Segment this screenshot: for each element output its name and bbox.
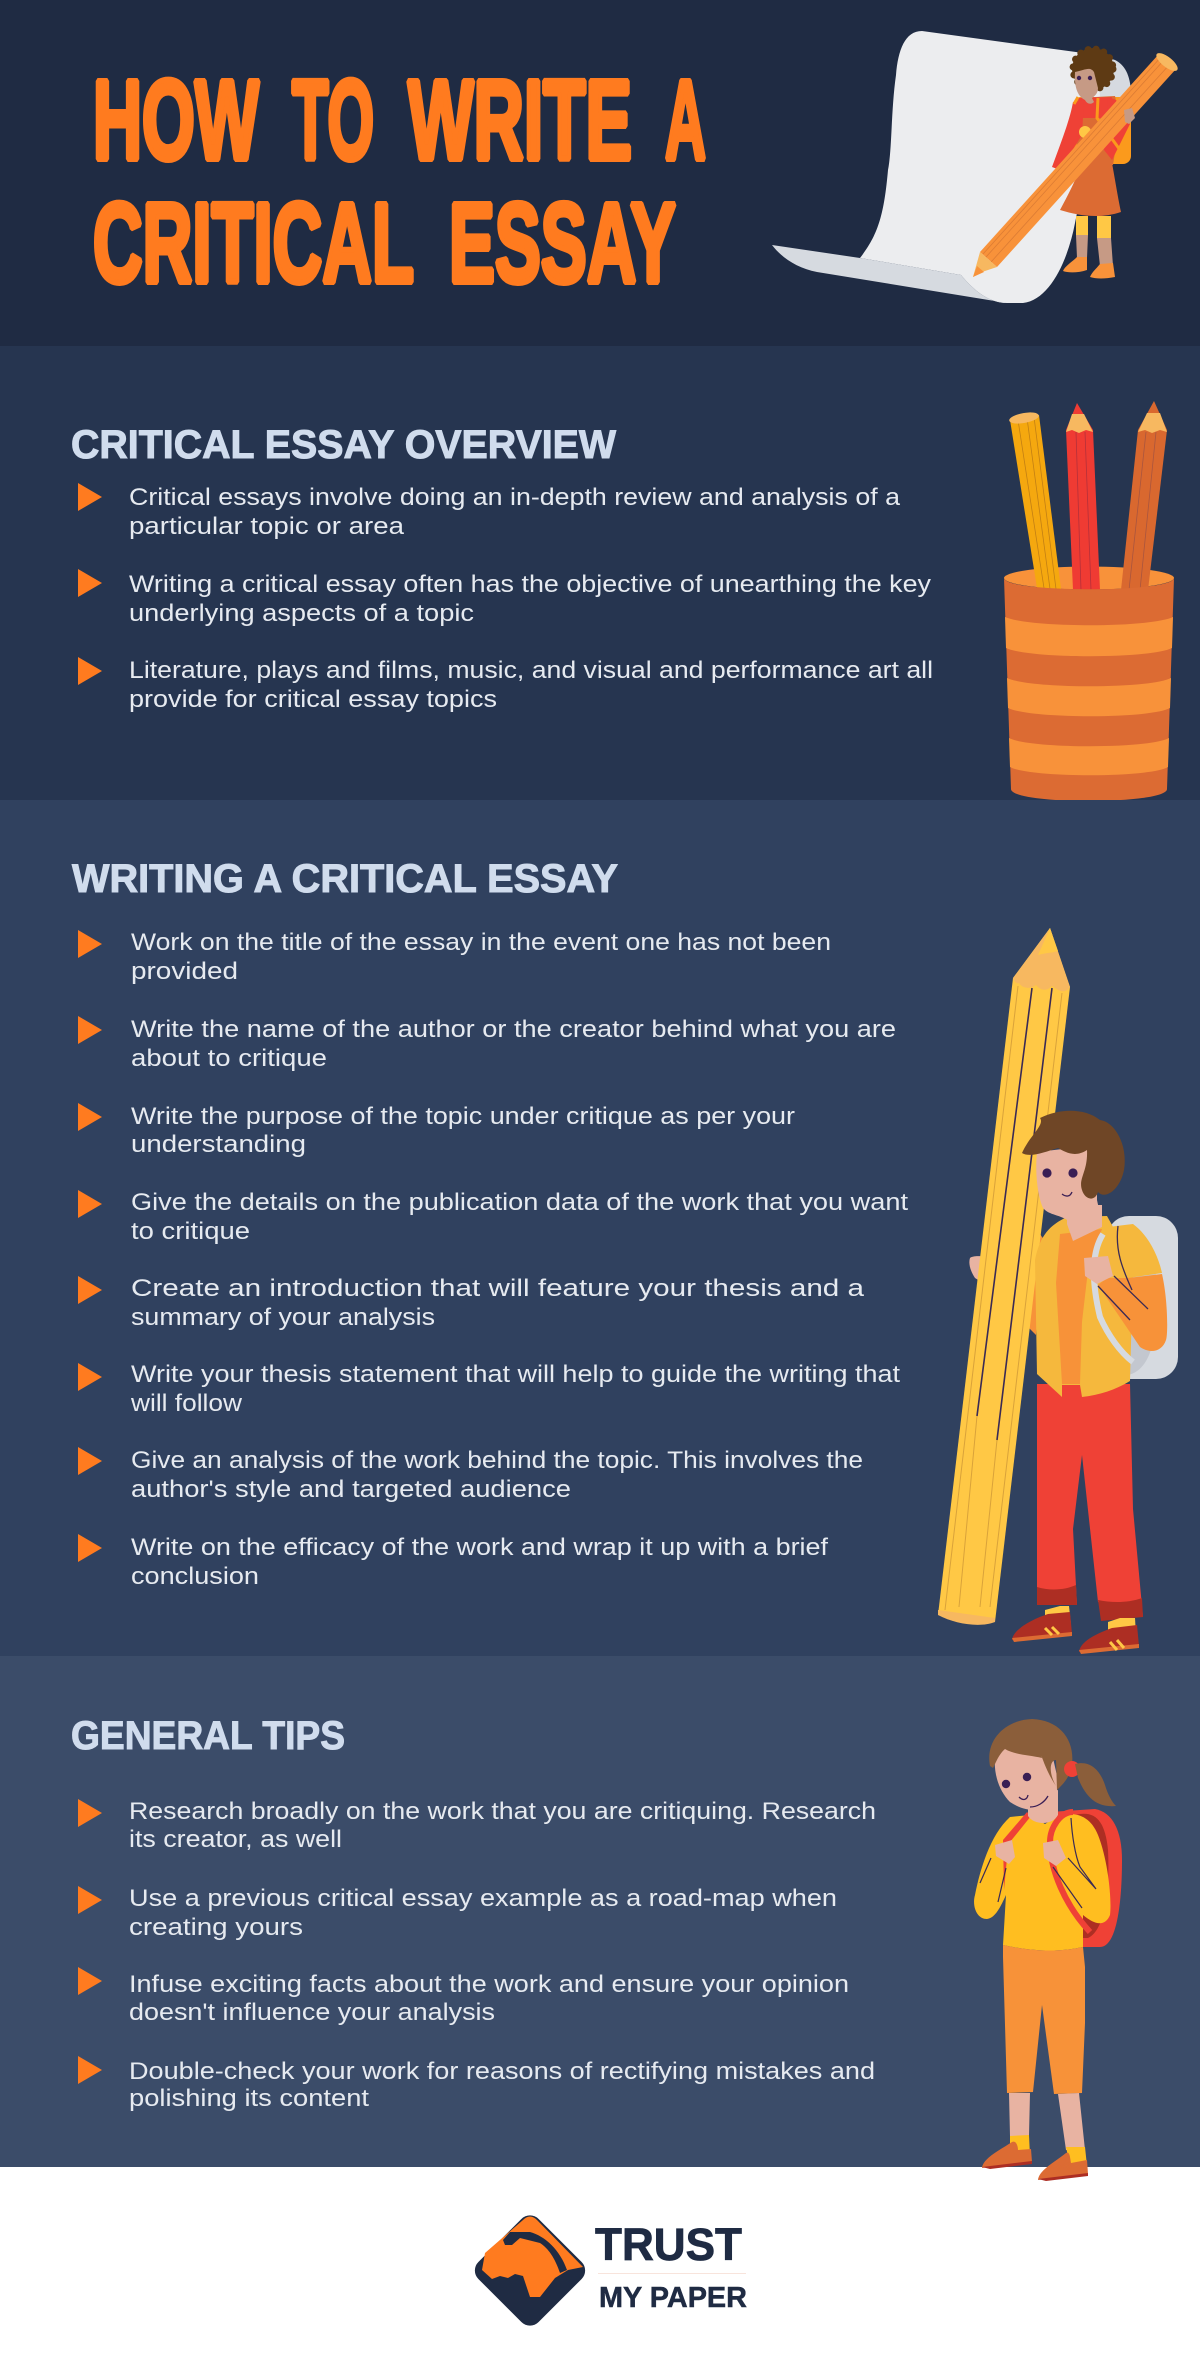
- bullet list: summary of your analysis: [131, 1304, 435, 1331]
- illustration: girl with backpack: [974, 1719, 1122, 2181]
- bullet list: Create an introduction that will feature your thesis and a: [131, 1275, 864, 1302]
- bullet list: Write your thesis statement that will help to guide the writing that: [131, 1361, 900, 1388]
- title: [93, 57, 706, 306]
- title: ESSAY: [449, 180, 676, 306]
- bullet list: understanding: [131, 1131, 306, 1158]
- bullet list: to critique: [131, 1218, 250, 1245]
- title: WRITE: [408, 57, 632, 183]
- footer logo: [470, 2210, 747, 2331]
- bullet list: Write on the efficacy of the work and wrap it up with a brief: [131, 1534, 828, 1561]
- bullet list: will follow: [130, 1390, 242, 1417]
- bullet list: [78, 1798, 876, 2112]
- bullet list: conclusion: [131, 1563, 259, 1590]
- bullet list: creating yours: [129, 1914, 303, 1941]
- bullet list: [78, 929, 908, 1590]
- bullet list: Double-check your work for reasons of rectifying mistakes and: [129, 2058, 875, 2085]
- bullet list: author's style and targeted audience: [131, 1476, 571, 1503]
- bullet list: particular topic or area: [129, 513, 404, 540]
- bullet list: Research broadly on the work that you are critiquing. Research: [129, 1798, 876, 1825]
- title: CRITICAL: [93, 180, 414, 306]
- heading: WRITING A CRITICAL ESSAY: [72, 857, 618, 901]
- wordmark: [595, 2219, 747, 2314]
- illustration: boy with giant pencil: [938, 928, 1178, 1654]
- bullet list: Use a previous critical essay example as a road-map when: [129, 1885, 837, 1912]
- wordmark: TRUST: [595, 2219, 742, 2270]
- panel: writing a critical essay: [0, 800, 1200, 1656]
- illustration: paper scroll with girl and pencil: [772, 31, 1180, 303]
- heading: GENERAL TIPS: [71, 1714, 345, 1758]
- bullet list: Literature, plays and films, music, and visual and performance art all: [129, 657, 933, 684]
- bullet list: provide for critical essay topics: [129, 686, 497, 713]
- bullet list: doesn't influence your analysis: [129, 1999, 495, 2026]
- bullet list: Give an analysis of the work behind the topic. This involves the: [131, 1447, 863, 1474]
- bullet list: Write the purpose of the topic under critique as per your: [131, 1103, 795, 1130]
- panel: header: [0, 0, 1200, 346]
- bullet list: Write the name of the author or the creator behind what you are: [131, 1016, 896, 1043]
- bullet list: Writing a critical essay often has the objective of unearthing the key: [129, 571, 932, 598]
- bullet list: Work on the title of the essay in the event one has not been: [131, 929, 831, 956]
- bullet list: [78, 483, 933, 713]
- panel: critical essay overview: [0, 346, 1200, 801]
- panel: general tips: [0, 1656, 1200, 2181]
- bullet list: its creator, as well: [129, 1826, 342, 1853]
- title: TO: [292, 57, 374, 183]
- heading: CRITICAL ESSAY OVERVIEW: [71, 423, 616, 467]
- bullet list: underlying aspects of a topic: [129, 600, 474, 627]
- bullet list: Infuse exciting facts about the work and ensure your opinion: [129, 1971, 849, 1998]
- bullet list: Give the details on the publication data of the work that you want: [131, 1189, 908, 1216]
- bullet list: about to critique: [131, 1045, 327, 1072]
- bullet list: provided: [131, 958, 238, 985]
- title: A: [665, 57, 706, 183]
- bullet list: polishing its content: [129, 2085, 369, 2112]
- illustration: pencil cup: [1004, 401, 1174, 801]
- wordmark: MY PAPER: [599, 2282, 747, 2314]
- bullet list: Critical essays involve doing an in-depth review and analysis of a: [129, 484, 900, 511]
- title: HOW: [93, 57, 259, 183]
